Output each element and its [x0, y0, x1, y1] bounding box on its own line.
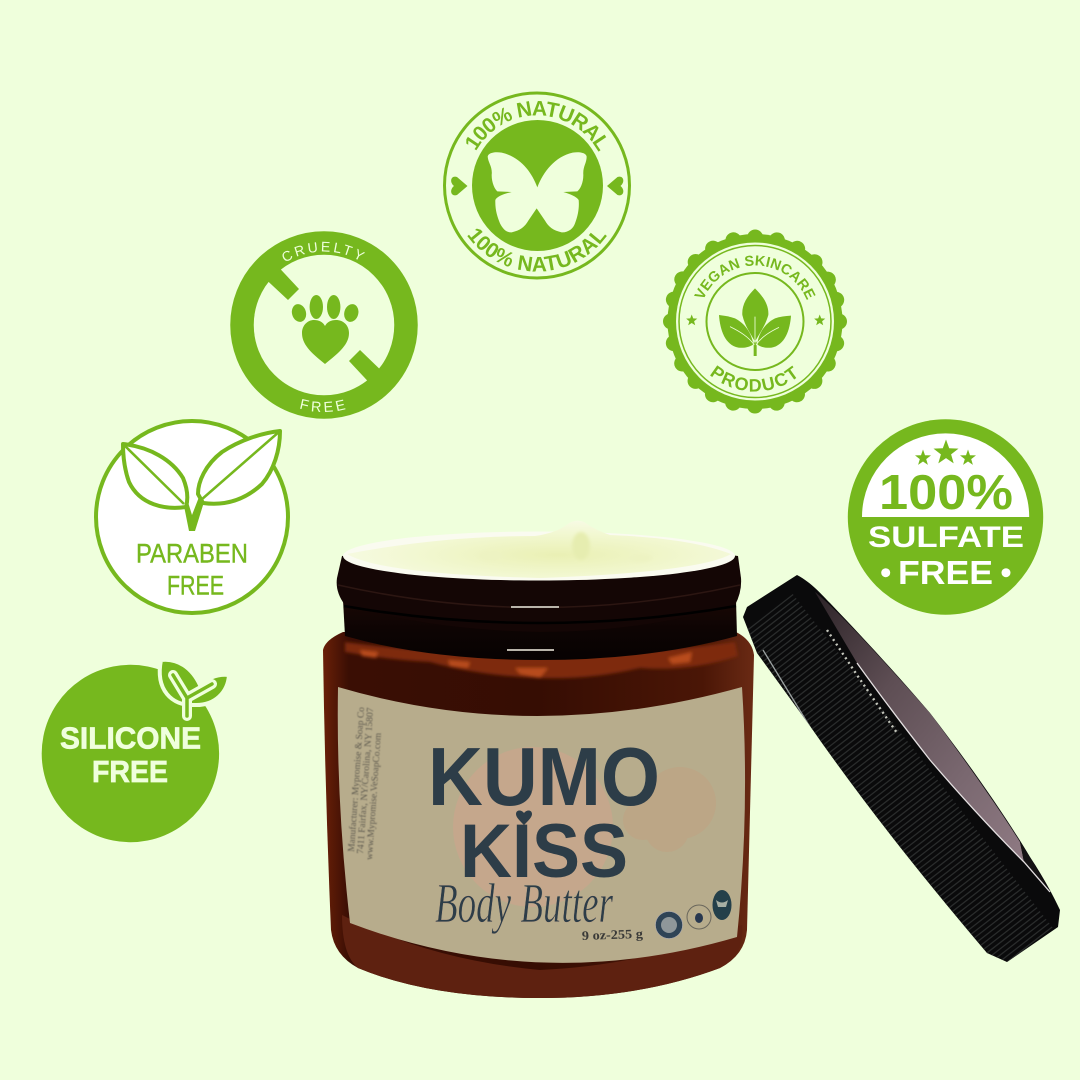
icon: three leaves — [719, 288, 791, 356]
lid — [743, 575, 1060, 962]
prohibition bar, upper — [258, 259, 299, 300]
icon: leaves — [123, 431, 280, 508]
icon: right heart — [607, 177, 623, 195]
bottom text: FREE — [300, 399, 346, 412]
badge: 100% natural — [443, 92, 631, 280]
badge: silicone free — [42, 660, 229, 842]
icon: paw — [290, 295, 360, 364]
icon: heart above I — [516, 810, 532, 825]
dark corner of top — [1020, 842, 1046, 886]
neck — [343, 600, 737, 660]
icon: sprout — [160, 660, 229, 716]
lid top face — [815, 592, 1024, 862]
jar body — [323, 632, 754, 998]
text: SILICONE: SILICONE — [60, 720, 201, 756]
top text: 100% NATURAL — [466, 101, 606, 152]
text: FREE: FREE — [898, 554, 993, 591]
badge: cruelty free — [230, 231, 418, 419]
text: PARABEN: PARABEN — [136, 538, 248, 568]
script: Body Butter: Body Butter — [435, 873, 613, 935]
stem — [184, 497, 204, 531]
badge: paraben free — [96, 421, 288, 613]
orange glow band — [345, 642, 738, 678]
vertical address text: www.Mypromise.VeSoapCo.com — [365, 732, 384, 860]
white dome — [862, 433, 1029, 517]
lip — [337, 542, 741, 632]
text: FREE: FREE — [167, 570, 224, 600]
jar — [323, 521, 754, 998]
badge: 100% sulfate free — [848, 419, 1043, 615]
bottom text: PRODUCT — [710, 365, 796, 392]
cream — [343, 521, 735, 580]
bottom glass tint — [342, 915, 742, 998]
mini badges — [656, 890, 732, 938]
cloud — [623, 767, 716, 852]
product name: KUMO: KUMO — [428, 730, 660, 823]
icon: butterfly — [488, 152, 587, 232]
icon: three stars — [915, 440, 976, 465]
text: 100%: 100% — [879, 466, 1013, 520]
vertical address text — [346, 706, 384, 860]
vertical address text: 7411 Fairfax, NY/Carolina, NY 15807 — [355, 707, 376, 854]
neck highlights — [507, 607, 559, 650]
weight text: 9 oz-255 g — [582, 926, 644, 943]
top text: VEGAN SKINCARE — [694, 255, 816, 300]
icon: right star — [814, 314, 825, 325]
vertical address text: Manufacturer: Mypromise & Soap Co — [346, 706, 367, 852]
icon: left star — [686, 314, 697, 325]
pink circle — [453, 747, 613, 907]
text: SULFATE: SULFATE — [868, 521, 1024, 554]
serrated highlight — [827, 630, 897, 733]
lip ridge — [338, 585, 740, 608]
text: FREE: FREE — [92, 754, 168, 789]
bottom text: 100% NATURAL — [467, 228, 607, 272]
icon: left heart — [451, 177, 468, 195]
prohibition bar, lower — [349, 350, 389, 391]
badge: vegan skincare — [663, 230, 847, 414]
inner disc — [472, 120, 603, 251]
top text: CRUELTY — [282, 242, 365, 261]
product name: KISS: KISS — [460, 809, 628, 894]
label — [338, 687, 745, 963]
knurled ribs — [762, 618, 1030, 962]
